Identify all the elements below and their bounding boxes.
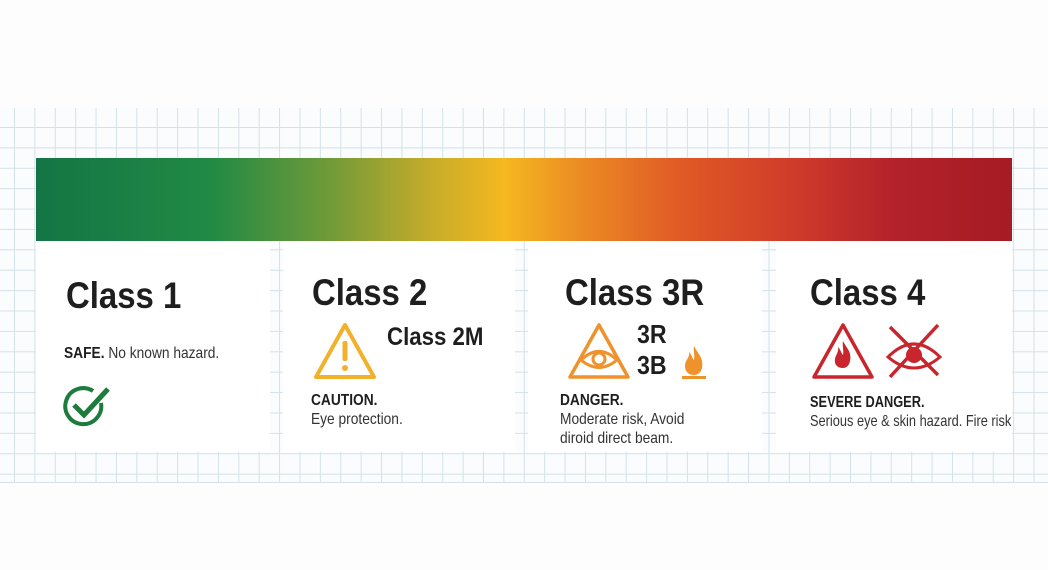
icon: flame <box>682 346 706 379</box>
panel: class 1 <box>36 241 270 452</box>
subheading: Class 2M: Class 2M <box>387 323 483 351</box>
panel: class 4 <box>776 241 1012 452</box>
icon: check <box>63 386 110 426</box>
heading: Class 2: Class 2 <box>312 272 427 313</box>
text: danger: diroid direct beam. <box>560 430 673 447</box>
icon: eye triangle <box>568 323 630 379</box>
gradient hazard bar <box>36 158 1012 241</box>
text: severe danger: Serious eye & skin hazard. Fire risk <box>810 413 1011 430</box>
grid background <box>0 108 1048 483</box>
panel: class 2 <box>283 241 515 452</box>
panel: class 3R <box>528 241 762 452</box>
labels: 3R 3B: 3R <box>637 319 667 349</box>
icon: warning triangle <box>314 322 376 379</box>
text: caution <box>311 392 403 428</box>
icon: fire triangle <box>812 323 874 379</box>
text: caution: Eye protection. <box>311 411 403 428</box>
text: danger: Moderate risk, Avoid <box>560 411 684 428</box>
labels: 3R 3B: 3B <box>637 350 667 380</box>
labels: 3R 3B <box>637 319 667 380</box>
heading: Class 1: Class 1 <box>66 275 181 316</box>
text: danger <box>560 392 684 447</box>
text: caution: CAUTION. <box>311 392 378 409</box>
text: severe danger: SEVERE DANGER. <box>810 394 925 411</box>
text: danger: DANGER. <box>560 392 623 409</box>
heading: Class 4: Class 4 <box>810 272 925 313</box>
heading: Class 3R: Class 3R <box>565 272 704 313</box>
text: severe danger <box>810 394 1012 430</box>
text: safe: SAFE. No known hazard. <box>64 345 219 362</box>
icon: crossed eye <box>886 324 942 378</box>
